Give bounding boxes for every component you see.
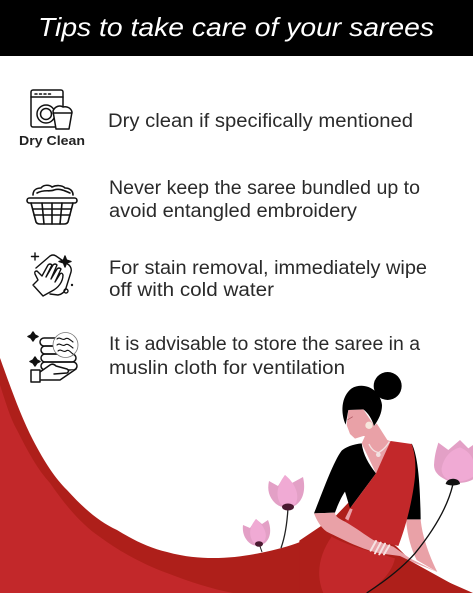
forearm and hand (314, 513, 437, 572)
label: Dry Clean: Dry Clean (19, 133, 85, 148)
right arm (406, 519, 437, 572)
lotus flower: medium (268, 475, 304, 548)
eye (347, 417, 353, 420)
neck and chest (362, 423, 392, 473)
necklace (369, 442, 389, 453)
tip text: stain removal (109, 258, 427, 301)
bangles (371, 541, 389, 554)
tip text: bundling (109, 178, 420, 222)
pallu (345, 441, 415, 546)
lotus stem (367, 485, 453, 593)
icon: hand wiping with cloth (32, 253, 72, 296)
woman in red saree (299, 372, 473, 593)
earring (365, 422, 373, 429)
header banner (0, 0, 473, 56)
tip text: muslin storage: muslin cloth for ventilation (109, 358, 345, 379)
waist sliver (345, 508, 353, 521)
tip text: muslin storage (109, 334, 420, 379)
tip text: muslin storage: It is advisable to store the saree in a (109, 334, 420, 355)
red wave background (0, 358, 473, 593)
tip text: bundling: Never keep the saree bundled up to (109, 178, 420, 199)
hair bun (374, 372, 402, 400)
icon: washing machine (31, 90, 72, 129)
skirt (299, 502, 468, 593)
lotus flower: small (243, 519, 270, 552)
tip text: dry clean: Dry clean if specifically mentioned (108, 111, 413, 132)
blouse (314, 443, 376, 513)
icon: towels with hand (28, 332, 78, 382)
hair (342, 386, 382, 426)
icon: laundry basket (27, 185, 77, 224)
lotus flower: large (434, 440, 473, 486)
title: Tips to take care of your sarees (38, 12, 434, 42)
tip text: bundling: avoid entangled embroidery (109, 201, 358, 222)
tip text: stain removal: For stain removal, immediately wipe (109, 258, 427, 279)
tip text: stain removal: off with cold water (109, 280, 275, 301)
face (347, 409, 374, 439)
